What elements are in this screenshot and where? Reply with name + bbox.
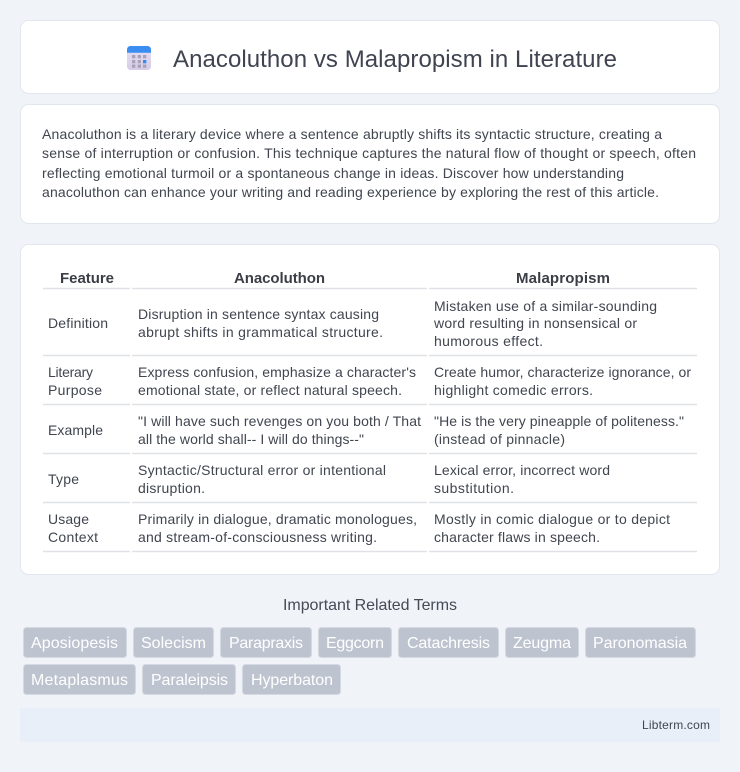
tag: Catachresis: Catachresis	[407, 635, 490, 652]
row: usage context: Primarily in dialogue, dramatic monologues,	[138, 511, 417, 527]
row: example: "I will have such revenges on you both / That	[138, 413, 421, 429]
table header: Anacoluthon	[234, 270, 325, 287]
tag: Catachresis	[398, 628, 498, 658]
row: definition	[48, 298, 657, 349]
row: literary purpose: Literary	[48, 364, 93, 380]
tag: Metaplasmus: Metaplasmus	[31, 672, 128, 689]
tag: Zeugma	[506, 628, 578, 658]
row: example: (instead of pinnacle)	[434, 431, 565, 447]
tag: Aposiopesis	[24, 628, 126, 658]
tag: Solecism	[134, 628, 214, 658]
tag: Hyperbaton	[242, 664, 340, 694]
tag: Paraleipsis	[142, 664, 236, 694]
intro text: sense of interruption or confusion. This technique captures the natural flow of thought or speech, often	[42, 145, 696, 161]
heading: related terms: Important Related Terms	[283, 597, 457, 614]
table header: Malapropism	[516, 270, 610, 287]
panel: comparison table	[20, 244, 720, 574]
intro text	[42, 126, 696, 200]
tag: Parapraxis: Parapraxis	[229, 635, 303, 652]
row: type: Syntactic/Structural error or intentional	[138, 462, 386, 478]
row: definition: Disruption in sentence syntax causing	[138, 306, 379, 322]
tag: Hyperbaton: Hyperbaton	[251, 672, 333, 689]
tag: Parapraxis	[220, 628, 312, 658]
row: definition: Mistaken use of a similar-sounding	[434, 298, 657, 314]
tag: Zeugma: Zeugma	[513, 635, 571, 652]
row: usage context: character flaws in speech.	[434, 529, 600, 545]
row: usage context: Context	[48, 529, 98, 545]
icon: calendar	[127, 46, 151, 70]
row: definition: word resulting in nonsensical or	[433, 315, 637, 331]
row: type: disruption.	[138, 480, 205, 496]
tag: Paronomasia: Paronomasia	[593, 635, 687, 652]
panel: introduction	[20, 104, 720, 224]
row: type: Type	[48, 471, 79, 487]
tag: Metaplasmus	[24, 664, 136, 694]
row: definition: Definition	[48, 315, 108, 331]
row: usage context: Usage	[48, 511, 89, 527]
tags: related terms	[24, 628, 696, 694]
tag: Eggcorn	[318, 628, 392, 658]
row: type: Lexical error, incorrect word	[434, 462, 610, 478]
title: Anacoluthon vs Malapropism in Literature	[173, 46, 617, 73]
row: usage context: Mostly in comic dialogue or to depict	[434, 511, 670, 527]
row: definition: abrupt shifts in grammatical structure.	[138, 324, 383, 340]
tag: Aposiopesis: Aposiopesis	[31, 635, 118, 652]
row: usage context	[48, 511, 670, 545]
intro text: reflecting emotional turmoil or a spontaneous change in ideas. Discover how understanding	[42, 165, 624, 181]
row: type	[48, 462, 610, 496]
footer credit: Libterm.com	[642, 718, 710, 732]
row: example: all the world shall-- I will do things--"	[138, 431, 364, 447]
footer	[20, 708, 720, 742]
row: literary purpose: Express confusion, emphasize a character's	[138, 364, 416, 380]
table header: Feature	[60, 270, 114, 287]
tag: Paraleipsis: Paraleipsis	[151, 672, 228, 689]
row: definition: humorous effect.	[434, 333, 543, 349]
tag: Paronomasia	[586, 628, 696, 658]
row: literary purpose: highlight comedic errors.	[434, 382, 593, 398]
row: usage context: and stream-of-consciousness writing.	[138, 529, 377, 545]
row: example: "He is the very pineapple of politeness."	[434, 413, 684, 429]
row: literary purpose: Purpose	[48, 382, 102, 398]
intro text: Anacoluthon is a literary device where a sentence abruptly shifts its syntactic structure, creating a	[42, 126, 662, 142]
panel: header	[20, 20, 720, 94]
row: literary purpose: Create humor, characterize ignorance, or	[434, 364, 691, 380]
row: literary purpose: emotional state, or reflect natural speech.	[138, 382, 402, 398]
tag: Solecism: Solecism	[141, 635, 206, 652]
row: literary purpose	[48, 364, 691, 398]
row: type: substitution.	[434, 480, 514, 496]
tag: Eggcorn: Eggcorn	[326, 635, 384, 652]
row: example	[48, 413, 684, 447]
table header	[60, 270, 610, 287]
row: example: Example	[48, 422, 103, 438]
intro text: anacoluthon can enhance your writing and reading experience by exploring the rest of this article.	[42, 184, 659, 200]
